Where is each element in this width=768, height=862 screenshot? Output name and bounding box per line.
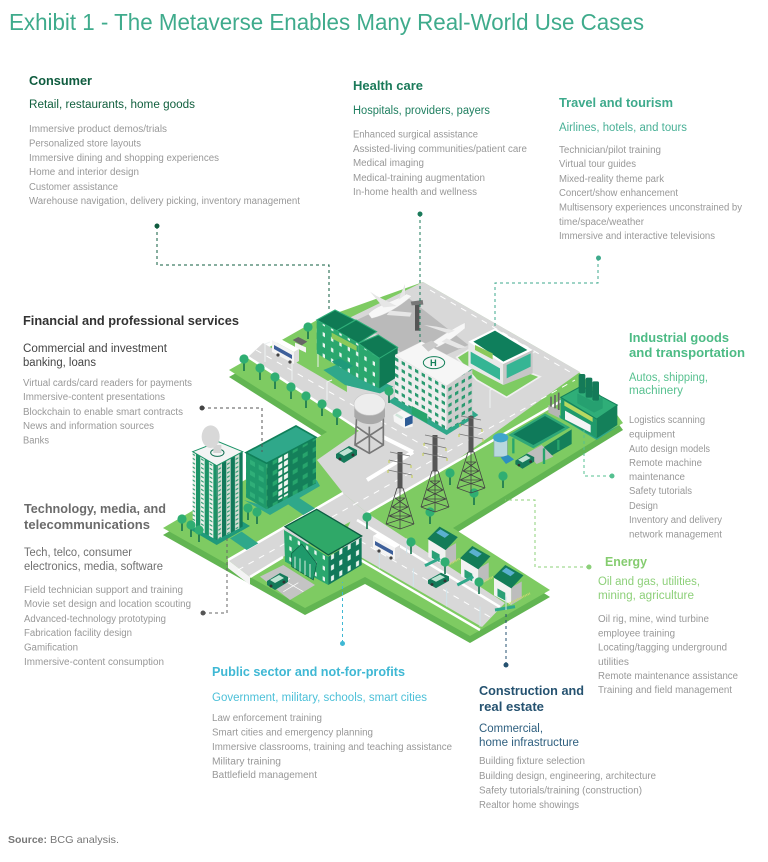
list: financial: Blockchain to enable smart contracts	[23, 407, 183, 418]
bank building	[284, 509, 362, 585]
heading: industrial: Industrial goods	[629, 330, 729, 345]
list: financial: News and information sources	[23, 421, 154, 432]
street lamps	[265, 342, 535, 408]
hotel lot	[457, 350, 540, 397]
list: consumer: Customer assistance	[29, 182, 118, 193]
list: financial: Virtual cards/card readers for payments	[23, 378, 192, 389]
title: Exhibit 1 - The Metaverse Enables Many Real-World Use Cases	[9, 9, 644, 35]
connector: construction	[504, 613, 508, 668]
connector: industrial	[584, 430, 614, 478]
panel: energy	[598, 554, 738, 696]
airport apron	[357, 297, 468, 367]
list: technology	[24, 585, 191, 668]
list: construction: Building fixture selection	[479, 756, 585, 767]
heading: financial: Financial and professional services	[23, 313, 239, 328]
list: energy: Locating/tagging underground	[598, 642, 727, 654]
heading: construction: real estate	[479, 699, 544, 714]
list: industrial: Remote machine	[629, 458, 702, 469]
heading: technology: Technology, media, and	[24, 501, 166, 516]
list: industrial: maintenance	[629, 472, 685, 483]
subheading: industrial: Autos, shipping,	[629, 372, 708, 384]
panel: public sector and not-for-profits	[212, 664, 452, 781]
panel: financial and professional services	[23, 313, 239, 446]
hotel	[468, 328, 533, 385]
car in water tower lot	[336, 446, 357, 463]
panel: travel and tourism	[559, 95, 742, 242]
house 1	[427, 527, 458, 567]
connector: consumer	[154, 224, 329, 312]
parking lot	[260, 565, 315, 600]
list: health care: Enhanced surgical assistance	[353, 130, 478, 140]
list: financial	[23, 378, 192, 446]
subheading: technology	[24, 547, 163, 573]
list: health care: Medical-training augmentation	[353, 173, 485, 184]
subheading: technology: electronics, media, software	[24, 561, 163, 573]
heading: industrial: and transportation	[629, 345, 745, 360]
subheading: travel: Airlines, hotels, and tours	[559, 122, 687, 134]
road network	[228, 282, 580, 630]
zoom-2 region: tech towers, bank, houses	[188, 425, 530, 627]
list: industrial: Inventory and delivery	[629, 515, 722, 526]
subheading: industrial: machinery	[629, 385, 683, 397]
list: industrial: Design	[629, 501, 658, 512]
subheading: construction	[479, 723, 579, 749]
subheading: consumer: Retail, restaurants, home goods	[29, 99, 195, 111]
source note	[8, 834, 119, 846]
factory	[559, 374, 620, 440]
list: energy: utilities	[598, 657, 629, 668]
hospital	[388, 341, 478, 435]
panel: industrial goods and transportation	[629, 330, 745, 540]
bus stop	[293, 337, 307, 353]
subheading: technology: Tech, telco, consumer	[24, 547, 132, 559]
heading: energy: Energy	[605, 554, 648, 569]
bus 1	[272, 337, 299, 364]
list: public sector: Immersive classrooms, training and teaching assistance	[212, 742, 452, 753]
list: travel: Multisensory experiences unconstrained by	[559, 202, 742, 214]
list: energy	[598, 614, 738, 696]
icon: satellite dish	[202, 425, 220, 448]
list: travel: Technician/pilot training	[559, 145, 661, 156]
truck	[515, 453, 534, 469]
panel: technology, media, telecommunications	[24, 501, 191, 668]
subheading: construction: Commercial,	[479, 723, 543, 735]
car on residential road	[428, 573, 449, 588]
list: industrial: Logistics scanning	[629, 415, 705, 426]
transformer	[548, 393, 560, 418]
list: public sector: Law enforcement training	[212, 713, 322, 724]
mid-rise office	[244, 426, 320, 515]
bus 2	[373, 533, 400, 560]
list: consumer	[29, 124, 300, 207]
list: public sector: Smart cities and emergency planning	[212, 728, 373, 738]
heading: health care: Health care	[353, 78, 423, 93]
heading: technology	[24, 501, 166, 532]
airplane 2	[424, 323, 467, 348]
subheading: energy	[598, 576, 700, 602]
heading: construction	[479, 683, 584, 714]
source note: BCG analysis.	[50, 834, 119, 846]
heading: construction: Construction and	[479, 683, 584, 698]
list: energy: employee training	[598, 628, 675, 640]
connector: energy	[505, 500, 592, 570]
subheading: financial: Commercial and investment	[23, 343, 168, 355]
heading: consumer: Consumer	[29, 73, 92, 88]
list: technology: Fabrication facility design	[24, 628, 132, 639]
subheading: energy: mining, agriculture	[598, 590, 694, 602]
list: health care: In-home health and wellness	[353, 187, 477, 198]
list: travel: Concert/show enhancement	[559, 188, 678, 199]
list: technology: Gamification	[24, 642, 78, 654]
subheading: construction: home infrastructure	[479, 737, 579, 749]
subheading: industrial	[629, 372, 708, 397]
subheading: financial	[23, 343, 168, 369]
control tower	[411, 300, 423, 331]
ambulance	[393, 410, 413, 428]
list: health care	[353, 130, 527, 198]
connector: financial	[200, 406, 262, 452]
zoom-4 region: energy and factory	[493, 374, 620, 469]
subheading: financial: banking, loans	[23, 357, 96, 369]
list: consumer: Personalized store layouts	[29, 138, 141, 150]
list: health care: Assisted-living communities/patient care	[353, 144, 527, 155]
panel: consumer	[29, 73, 300, 207]
airplane 1	[368, 284, 412, 318]
lamp posts on road	[379, 538, 506, 627]
list: consumer: Home and interior design	[29, 167, 139, 178]
driveways and fences	[425, 558, 530, 610]
list: industrial: Safety tutorials	[629, 486, 692, 497]
list: industrial	[629, 415, 722, 540]
list: financial: Banks	[23, 436, 49, 446]
list: technology: Advanced-technology prototyping	[24, 614, 166, 625]
subheading: public sector: Government, military, schools, smart cities	[212, 692, 427, 704]
list: technology: Immersive-content consumption	[24, 657, 164, 668]
list: travel: Virtual tour guides	[559, 159, 636, 170]
list: energy: Oil rig, mine, wind turbine	[598, 614, 709, 625]
list: construction: Building design, engineering, architecture	[479, 771, 656, 782]
list: energy: Training and field management	[598, 685, 732, 696]
house 3	[493, 565, 523, 605]
heading: industrial	[629, 330, 745, 360]
list: public sector: Military training	[212, 756, 281, 768]
hospital: H	[430, 358, 437, 368]
water tower	[354, 393, 385, 453]
list: industrial: equipment	[629, 430, 675, 440]
heading: technology: telecommunications	[24, 517, 150, 532]
list: construction: Realtor home showings	[479, 800, 579, 811]
tall telecom building	[188, 425, 258, 550]
zoom-1 region: airport, shopping, hospital, hotel	[293, 284, 540, 453]
connector: technology	[200, 535, 227, 616]
subheading: energy: Oil and gas, utilities,	[598, 576, 700, 588]
list: energy: Remote maintenance assistance	[598, 671, 738, 682]
list: consumer: Immersive dining and shopping experiences	[29, 153, 219, 164]
electricity pylons	[386, 416, 485, 529]
list: construction: Safety tutorials/training (construction)	[479, 786, 642, 796]
isometric city illustration	[163, 282, 623, 643]
list: financial: Immersive-content presentations	[23, 392, 165, 403]
list: travel	[559, 145, 742, 242]
subheading: health care: Hospitals, providers, payers	[353, 105, 490, 117]
list: industrial: network management	[629, 530, 722, 540]
list: consumer: Warehouse navigation, delivery picking, inventory management	[29, 196, 300, 207]
list: public sector: Battlefield management	[212, 770, 317, 781]
list: travel: Mixed-reality theme park	[559, 174, 665, 185]
connector: public sector	[340, 582, 345, 646]
panel: construction and real estate	[479, 683, 656, 811]
list: technology: Field technician support and training	[24, 585, 183, 596]
list: industrial: Auto design models	[629, 444, 710, 455]
water tank	[493, 433, 514, 464]
list: construction	[479, 756, 656, 811]
list: travel: Immersive and interactive televisions	[559, 231, 715, 242]
heading: public sector: Public sector and not-for-profits	[212, 664, 405, 679]
trees	[177, 322, 508, 594]
source note: Source:	[8, 834, 47, 846]
ground platform	[163, 282, 623, 643]
list: public sector	[212, 713, 452, 781]
heading: travel: Travel and tourism	[559, 95, 673, 110]
panel: health care	[353, 78, 527, 198]
shopping centre	[317, 310, 398, 393]
service station	[508, 413, 572, 464]
list: travel: time/space/weather	[559, 217, 645, 228]
list: technology: Movie set design and location scouting	[24, 599, 191, 610]
list: health care: Medical imaging	[353, 158, 424, 169]
house 2	[460, 546, 490, 586]
connector: travel	[495, 256, 601, 327]
car on lot 2	[267, 573, 288, 590]
list: consumer: Immersive product demos/trials	[29, 124, 167, 135]
connector: health care	[418, 212, 422, 342]
